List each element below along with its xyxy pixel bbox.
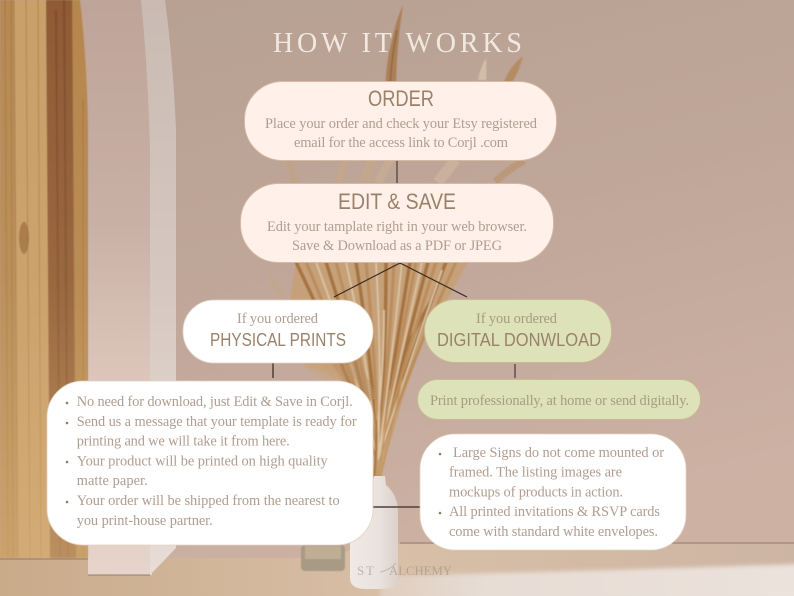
watermark: ST xyxy=(357,563,374,578)
watermark xyxy=(357,563,453,578)
watermark: ALCHEMY xyxy=(389,563,453,578)
panel: edit and save xyxy=(240,184,554,262)
wood planks xyxy=(0,0,88,558)
digital download intro: If you ordered xyxy=(476,311,558,327)
pedestal shadow xyxy=(88,574,150,576)
top plume xyxy=(385,5,403,95)
print options text: Print professionally, at home or send digitally. xyxy=(430,393,689,409)
bullet list: digital download: framed. The listing images are xyxy=(449,464,622,480)
glass jar xyxy=(301,545,345,571)
edit and save text: Save & Download as a PDF or JPEG xyxy=(292,238,502,254)
bullet list: physical prints: Your order will be shipped from the nearest to xyxy=(77,493,340,509)
bullet list: digital download xyxy=(439,445,664,540)
connector lines xyxy=(273,160,515,507)
bullet list: physical prints: No need for download, just Edit & Save in Corjl. xyxy=(77,394,353,410)
bullet list: digital download: All printed invitations & RSVP cards xyxy=(449,504,660,520)
order text: email for the access link to Corjl .com xyxy=(294,135,508,151)
floor shadow line xyxy=(0,543,794,559)
order text: Place your order and check your Etsy registered xyxy=(265,116,538,132)
bullet list: digital download: Large Signs do not come mounted or xyxy=(453,445,664,461)
bullet list: physical prints: printing and we will take it from here. xyxy=(77,434,290,450)
floor xyxy=(0,544,794,596)
heading: order: ORDER xyxy=(368,86,434,111)
bullet list: physical prints xyxy=(66,394,357,529)
panel: print options xyxy=(418,380,700,420)
panel: digital download details xyxy=(420,434,686,550)
bullet list: digital download: come with standard white envelopes. xyxy=(449,524,658,540)
heading: physical prints: PHYSICAL PRINTS xyxy=(210,329,346,350)
feather streaks, dark xyxy=(296,262,446,460)
panel: order xyxy=(244,82,556,160)
plume mass xyxy=(290,262,468,478)
bullet list: physical prints: Send us a message that your template is ready for xyxy=(77,414,357,430)
sunlit floor patch xyxy=(380,564,794,596)
edit and save text: Edit your tamplate right in your web browser. xyxy=(267,219,527,235)
physical prints intro: If you ordered xyxy=(237,311,319,327)
bullet list: digital download: mockups of products in action. xyxy=(449,484,623,500)
panel: physical prints xyxy=(183,300,373,363)
feather streaks, pale xyxy=(316,262,442,460)
feather streaks, mid xyxy=(306,262,456,460)
bullet list: physical prints: you print-house partner. xyxy=(77,513,213,529)
heading: digital download: DIGITAL DONWLOAD xyxy=(437,329,601,350)
vase xyxy=(350,476,398,589)
lower tufts xyxy=(306,362,336,380)
title: HOW IT WORKS xyxy=(273,28,522,59)
edit and save text xyxy=(267,219,527,254)
gap tufts xyxy=(288,160,295,182)
bullet list: physical prints: Your product will be printed on high quality xyxy=(77,454,328,470)
pampas grass xyxy=(270,5,524,478)
panel: physical prints details xyxy=(47,381,373,545)
arch inner wall xyxy=(78,0,152,575)
panel: digital download xyxy=(424,300,612,362)
arch white edge xyxy=(141,0,176,575)
heading: edit and save: EDIT & SAVE xyxy=(338,189,456,214)
order text xyxy=(265,116,538,151)
bullet list: physical prints: matte paper. xyxy=(77,473,148,489)
stems xyxy=(372,380,402,478)
